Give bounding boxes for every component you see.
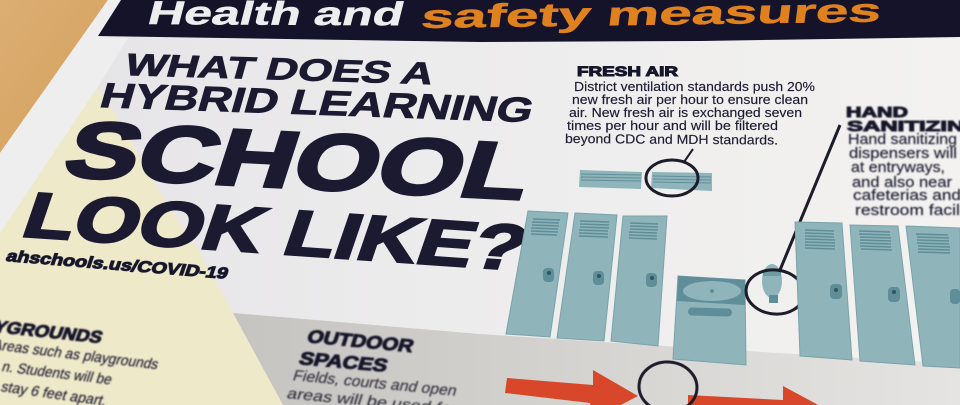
paragraph: fresh air: District ventilation standards push 20% — [574, 79, 815, 94]
paragraph: hand sanitizing — [848, 131, 960, 219]
callout circle on floor — [637, 360, 699, 405]
title line 3: SCHOOL — [54, 105, 544, 217]
icon: ceiling vents with callout circle — [579, 149, 712, 196]
paragraph: playgrounds: n. Students will be — [0, 360, 114, 388]
title line 4: LOOK LIKE? — [14, 179, 537, 283]
title line 2: HYBRID LEARNING — [96, 76, 539, 130]
lockers: left group — [506, 211, 667, 346]
paragraph: hand sanitizing: Hand sanitizing — [848, 131, 957, 148]
banner — [98, 0, 960, 42]
paragraph: hand sanitizing: and also near — [852, 174, 952, 191]
paragraph: hand sanitizing: cafeterias and — [853, 187, 960, 204]
yellow background shape — [0, 88, 283, 405]
heading: outdoor spaces: OUTDOOR — [305, 327, 416, 356]
paragraph: fresh air: beyond CDC and MDH standards. — [565, 131, 778, 147]
paragraph: hand sanitizing: dispensers will — [849, 145, 957, 162]
paragraph: fresh air: new fresh air per hour to ensure clean — [572, 92, 808, 107]
paragraph: outdoor spaces: Fields, courts and open — [291, 367, 459, 400]
white paper margin — [0, 0, 128, 235]
website link: ahschools.us/COVID-19 — [4, 248, 231, 283]
panel: hand sanitizing text: SANITIZING — [847, 118, 960, 135]
lockers: right group — [795, 222, 960, 368]
main title — [14, 48, 544, 283]
gray floor band — [233, 313, 960, 405]
arrow 2 — [688, 386, 830, 405]
paragraph: fresh air — [565, 79, 815, 147]
heading: hand sanitizing: HAND — [846, 104, 908, 121]
panel: playgrounds — [0, 313, 161, 405]
panel: hand sanitizing text — [846, 104, 960, 219]
paragraph: playgrounds — [0, 338, 161, 405]
paragraph: fresh air: air. New fresh air is exchanged seven — [569, 105, 802, 120]
sink cabinet — [673, 276, 746, 365]
title line 1: WHAT DOES A — [121, 48, 439, 91]
paragraph: fresh air: times per hour and will be filtered — [567, 118, 778, 133]
panel: outdoor spaces: SPACES — [297, 349, 390, 376]
panel: outdoor spaces — [285, 327, 459, 405]
icon: hand sanitizer dispenser with callout — [744, 125, 840, 317]
panel: fresh air text — [565, 63, 815, 147]
paragraph: hand sanitizing: at entryways, — [851, 159, 945, 176]
arrow 1 — [505, 370, 638, 405]
wooden table background — [0, 0, 108, 153]
heading: fresh air: FRESH AIR — [577, 63, 678, 79]
